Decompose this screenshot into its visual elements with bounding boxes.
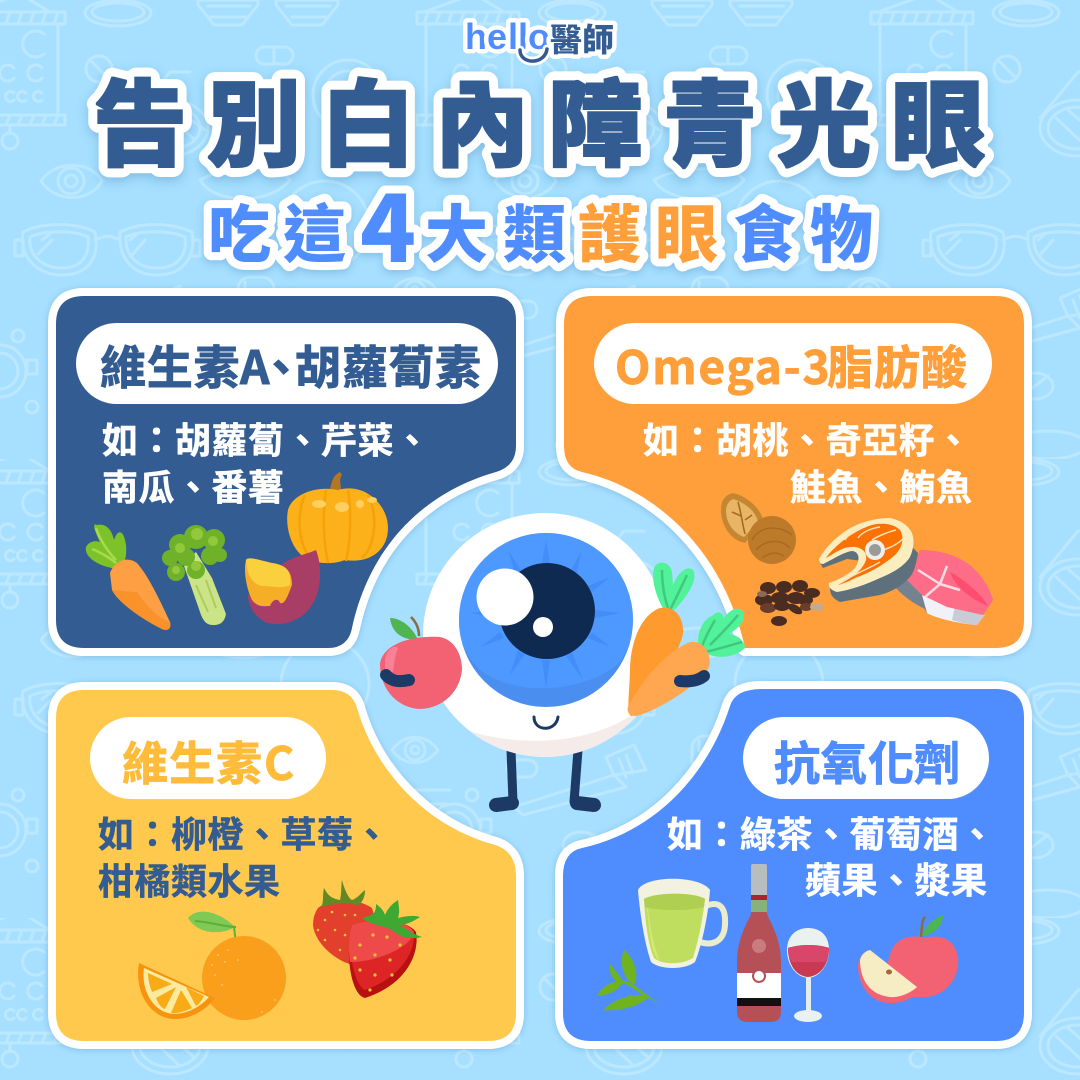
icon: apple in left hand [380,617,462,709]
eyeball body [423,513,667,757]
food list: vitamin C [98,806,390,905]
food list: vitamin A [102,412,431,511]
pill heading: omega-3: 脂 [827,332,875,398]
pill heading: omega-3: Omega-3 [615,332,831,398]
panel: vitamin C [56,690,516,1041]
pupil [499,563,595,659]
food list: vitamin A: 南瓜、番薯 [102,459,285,511]
food list: antioxidants [667,806,996,904]
title: 告別白內障青光眼 [93,50,985,186]
icon: tuna steak [895,550,993,625]
subtitle: 護眼食物 [578,185,873,276]
eye character [380,513,745,805]
icon: pumpkin [287,472,388,563]
panel background: yellow [56,690,516,1041]
food list: antioxidants: 蘋果、漿果 [805,852,988,904]
subtitle: 吃這 [208,185,346,276]
icon: orange with slice [138,912,286,1020]
iris [459,533,633,707]
food list: omega-3: 如：胡桃、奇亞籽、 [643,412,972,464]
logo: hello醫師: hello [465,16,550,57]
icon: tea leaves [597,950,667,1010]
pill heading: vitamin C [90,717,326,799]
legs and feet [496,750,594,805]
eye highlights [476,568,553,637]
pill heading: omega-3 [594,323,992,404]
panel background: blue [563,689,1024,1041]
food list: antioxidants: 如：綠茶、葡萄酒、 [667,806,996,858]
pill heading: vitamin A: 維生素A、胡蘿蔔素 [100,332,481,398]
icon: strawberries [313,880,422,998]
pill heading: omega-3: 肪 [874,332,922,398]
icon: carrots in right hand [628,563,745,716]
food list: vitamin C: 柑橘類水果 [98,853,281,905]
food list: omega-3: 鮭魚、鮪魚 [790,459,973,511]
panel: omega-3 [564,296,1024,648]
food list: vitamin C: 如：柳橙、草莓、 [98,806,390,858]
logo: hello醫師: 醫師 [550,15,614,61]
icon: carrot [86,524,170,630]
icon: walnuts [721,493,796,564]
icon: apple with slice [858,915,958,1003]
subtitle: 4 [360,156,416,289]
logo: hello醫師 [465,15,614,61]
icon: wine bottle [737,864,781,1022]
pill heading: omega-3: 酸 [921,332,969,398]
icon: celery [162,525,227,625]
pill heading: antioxidants: 抗氧化劑 [774,728,960,794]
pill heading: vitamin C: 維生素C [122,728,294,794]
smile [534,717,558,728]
food list: omega-3 [643,412,973,511]
panel: vitamin A and carotene [56,296,516,648]
icon: green tea mug [638,879,725,968]
panel: antioxidants [563,689,1024,1041]
icon: sweet potato [245,550,320,624]
pill heading: antioxidants [743,717,989,799]
food list: vitamin A: 如：胡蘿蔔、芹菜、 [102,412,431,464]
icon: salmon steak [819,518,918,602]
subtitle: 大類 [425,185,566,276]
panel background: orange [564,296,1024,648]
icon: chia seeds [755,580,824,626]
icon: wine glass [787,928,829,1022]
panel background: dark blue [56,296,516,648]
